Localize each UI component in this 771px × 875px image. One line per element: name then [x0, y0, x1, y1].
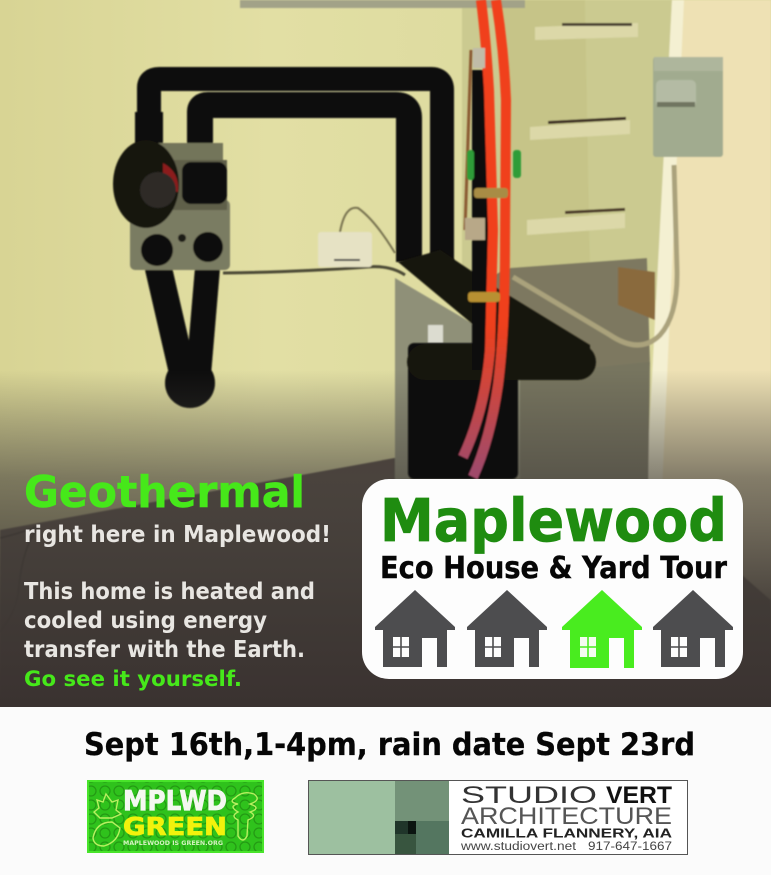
logo title: Maplewood: Maplewood: [380, 486, 727, 555]
logo: Studio Vert Architecture: CAMILLA FLANNERY, AIA: [461, 826, 672, 840]
text block: description: This home is heated and: [24, 579, 315, 605]
subheading: right here in Maplewood!: [24, 522, 331, 548]
text block: description: cooled using energy: [24, 608, 267, 634]
logo: MPLWD Green: [87, 780, 264, 853]
call to action: Go see it yourself.: [24, 667, 242, 692]
logo: Studio Vert Architecture: ARCHITECTURE: [461, 803, 672, 830]
footer band: [0, 707, 771, 875]
logo: Studio Vert Architecture: www.studiovert.net: [460, 841, 577, 853]
text block: description: transfer with the Earth.: [24, 637, 305, 663]
icon: house 1: [375, 590, 455, 667]
panel: tour logo: [362, 479, 743, 679]
heading: Geothermal: Geothermal: [24, 467, 305, 518]
logo: Studio Vert Architecture: 917-647-1667: [588, 841, 672, 853]
icon: green house: [562, 590, 642, 668]
logo: Studio Vert Architecture: VERT: [606, 782, 672, 809]
icon: house 2: [467, 590, 547, 667]
text block: description: [24, 579, 315, 663]
event date: Sept 16th,1-4pm, rain date Sept 23rd: [84, 727, 695, 763]
logo: MPLWD Green: GREEN: [123, 812, 227, 841]
logo: Studio Vert Architecture: [308, 780, 688, 854]
logo: MPLWD Green: MPLWD: [123, 784, 227, 817]
logo: Studio Vert Architecture: STUDIO: [461, 782, 597, 809]
icon: house 4: [653, 590, 733, 667]
logo: MPLWD Green: MAPLEWOOD IS GREEN.ORG: [123, 839, 223, 847]
logo subtitle: Eco House & Yard Tour: [380, 551, 727, 586]
